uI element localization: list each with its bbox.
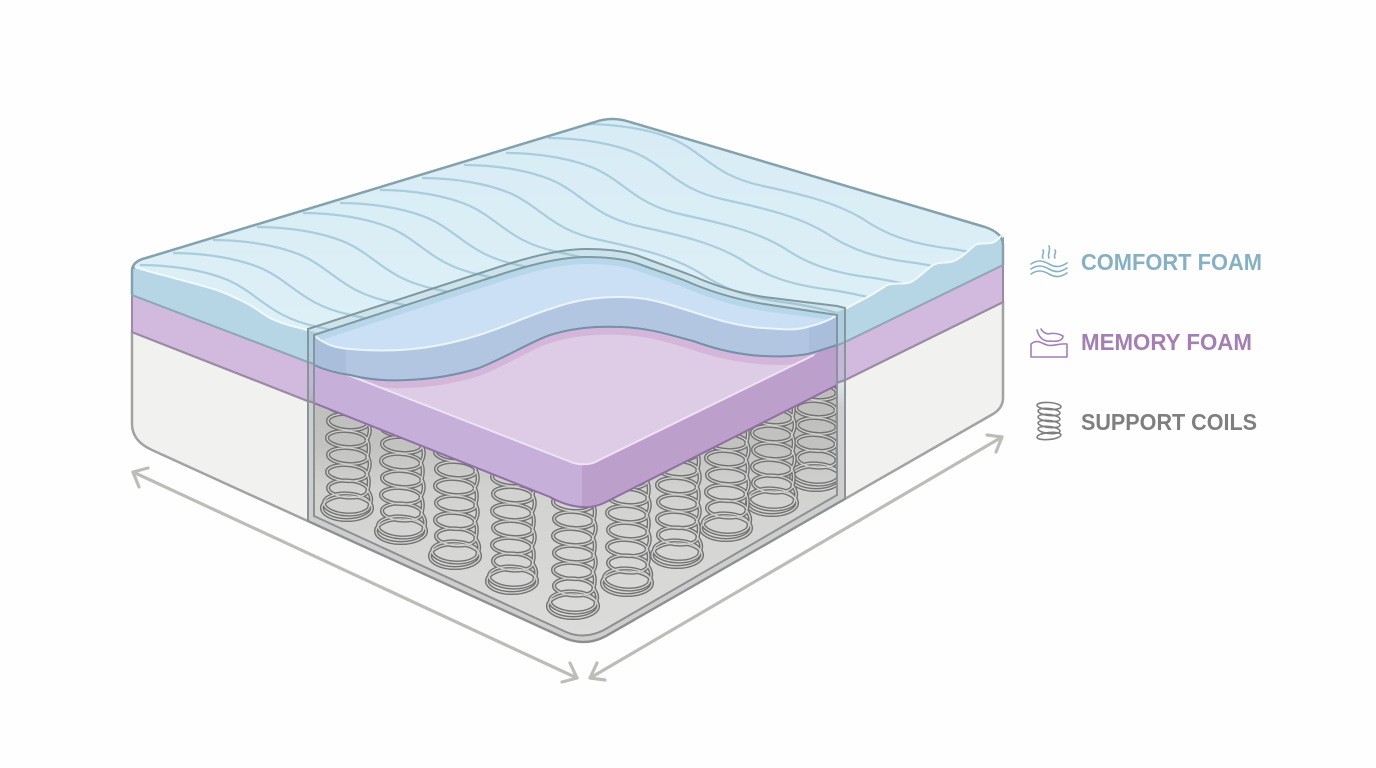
label: support coils: SUPPORT COILS (1081, 409, 1257, 435)
comfort foam lower edge (314, 327, 837, 380)
icon: hand pressing foam (1031, 329, 1067, 357)
memory foam top shadow (340, 327, 830, 388)
legend item: support coils (1037, 402, 1257, 441)
comfort foam back band (318, 261, 832, 338)
layer: comfort foam side (132, 200, 1003, 450)
wavy surface lines (140, 123, 968, 330)
memory foam edges (343, 355, 814, 464)
window frame (308, 249, 845, 642)
layer: memory foam side (132, 265, 1003, 470)
dimension arrow: width (133, 468, 577, 682)
layer: comfort foam top surface (135, 119, 1003, 400)
label: memory foam: MEMORY FOAM (1081, 329, 1252, 355)
comfort foam side (314, 297, 837, 380)
comfort foam block (314, 257, 837, 380)
legend item: memory foam (1031, 329, 1252, 357)
icon: waves and steam (1031, 246, 1067, 277)
cutaway window (308, 249, 845, 642)
coil rows (322, 366, 841, 618)
support coils compartment (315, 386, 836, 634)
layer: base support side (132, 302, 1003, 642)
legend item: comfort foam (1031, 246, 1262, 277)
legend (1031, 246, 1262, 441)
mattress cutaway illustration (130, 118, 1004, 644)
memory foam right side (582, 340, 837, 507)
top surface outline and front highlight (132, 119, 1003, 330)
memory foam top face (343, 300, 837, 464)
comfort foam top (314, 257, 837, 351)
memory foam block (314, 300, 837, 507)
icon: coil spring (1037, 402, 1061, 441)
dimension arrow: length (590, 435, 1002, 680)
comfort foam side end shading (314, 336, 346, 374)
memory foam left side (314, 362, 582, 507)
label: comfort foam: COMFORT FOAM (1081, 249, 1262, 275)
comfort foam highlight (316, 297, 837, 351)
